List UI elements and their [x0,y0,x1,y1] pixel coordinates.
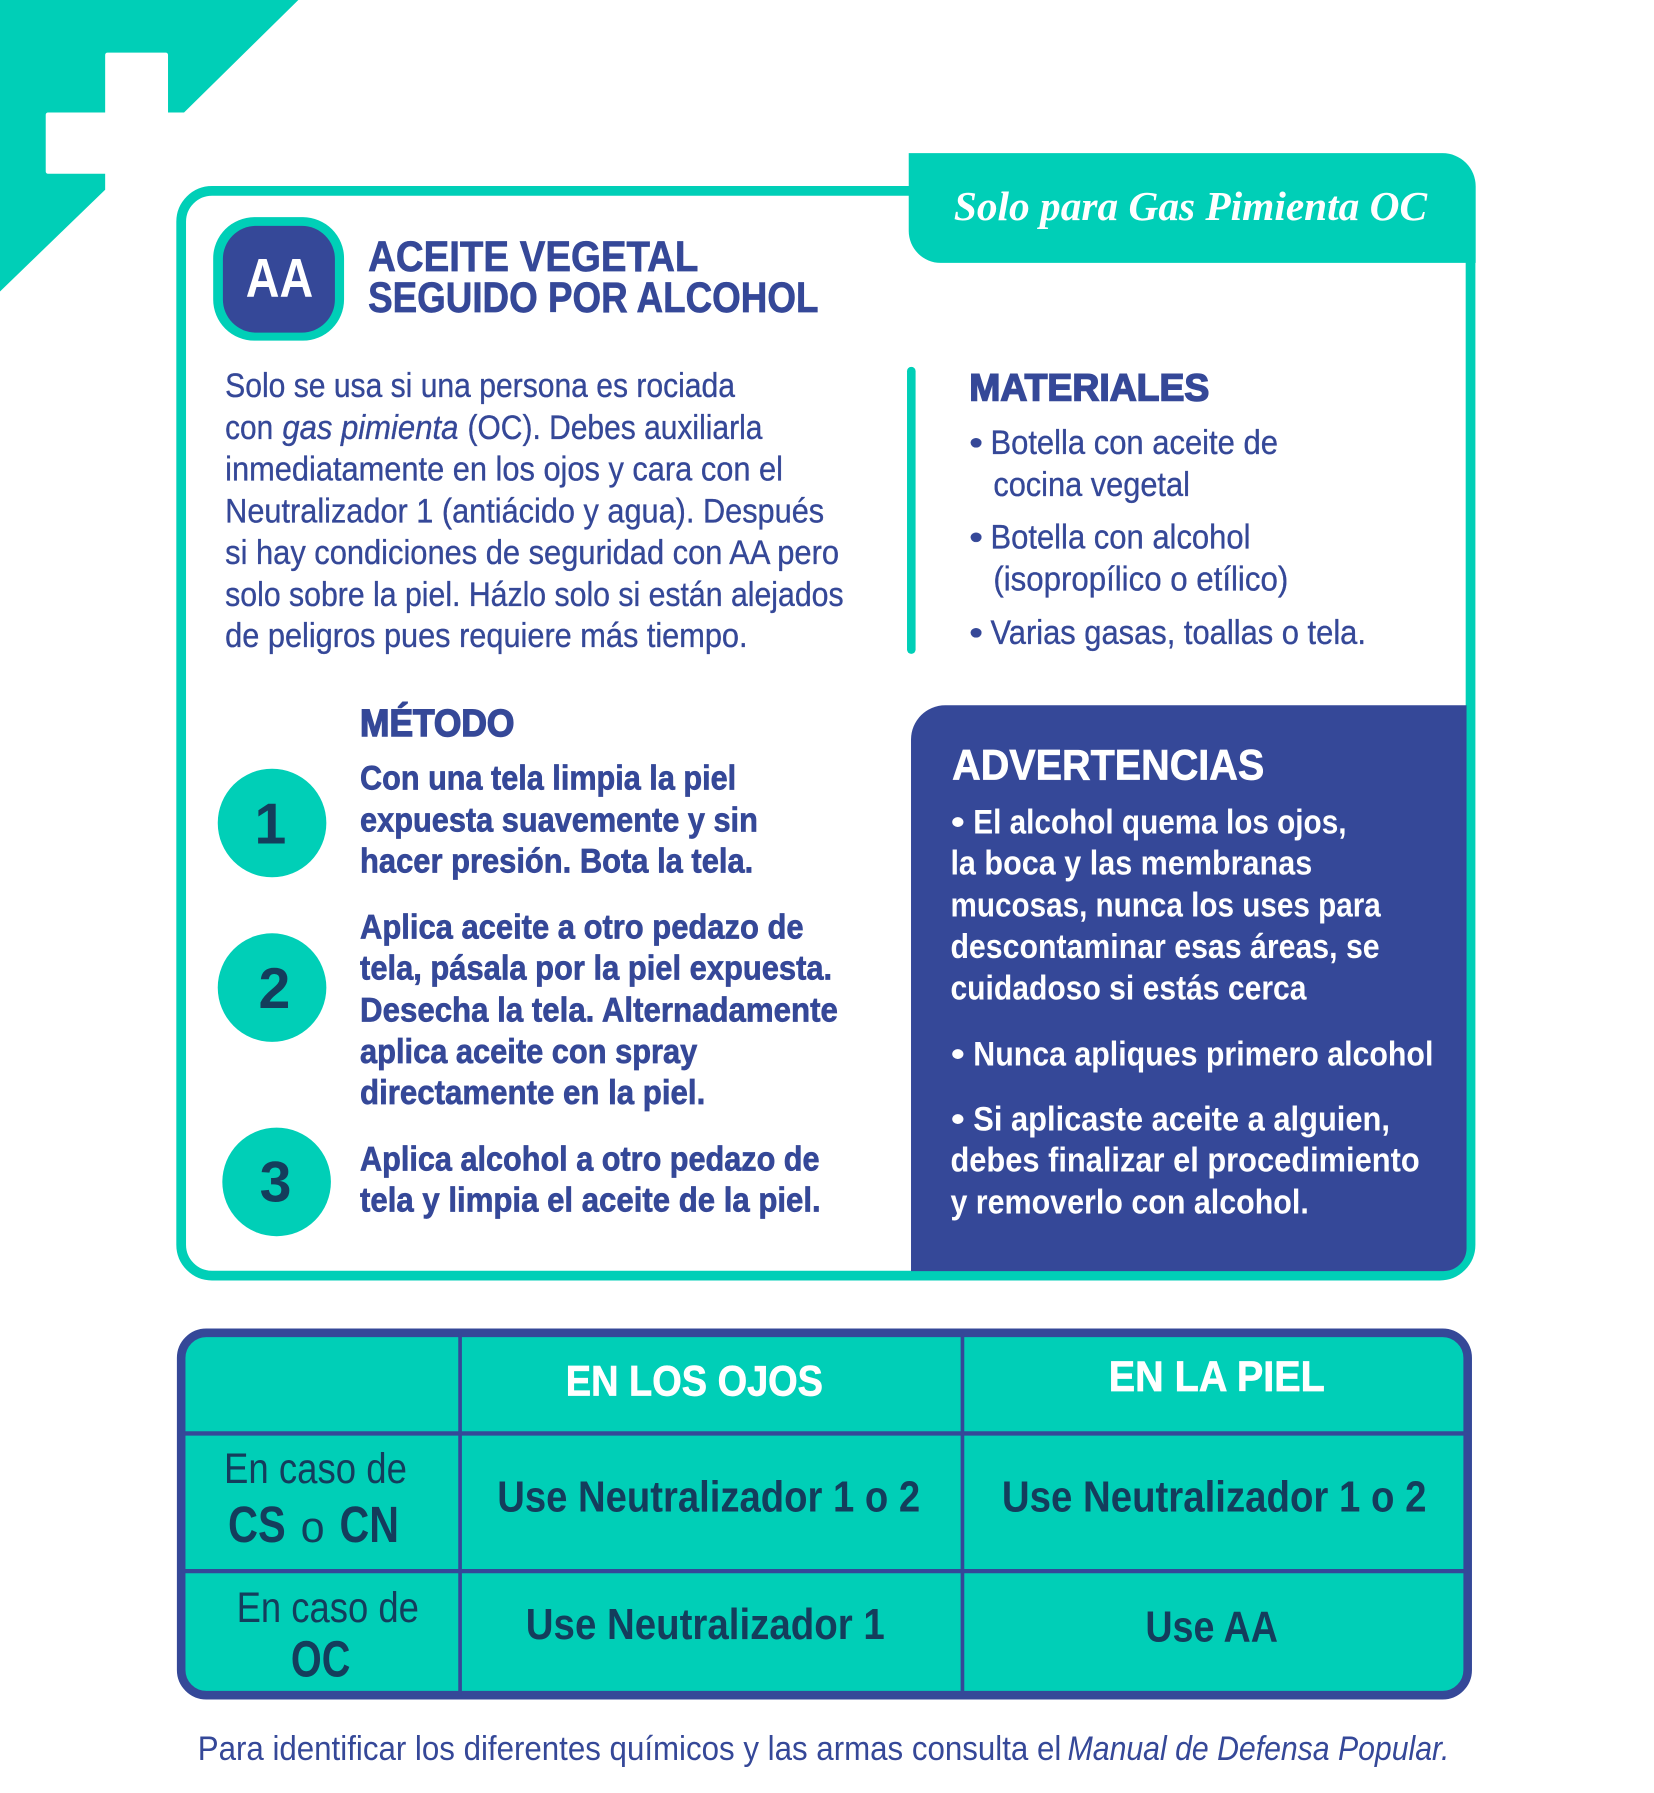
heading: ACEITE VEGETAL [368,233,698,280]
materiales list: • [969,424,983,462]
advertencias list: debes finalizar el procedimiento [950,1142,1420,1180]
advertencias list: descontaminar esas áreas, se [950,928,1380,966]
cell: ojos OC: Use Neutralizador 1 [526,1601,885,1649]
step 1 text [360,759,758,881]
tab: solo para gas pimienta [909,153,1476,263]
intro text block: gas pimienta [282,409,458,447]
row label: OC: OC [291,1630,350,1688]
row label: CS o CN [224,1445,407,1553]
advertencias heading: ADVERTENCIAS [952,742,1264,789]
row label: CS o CN: En caso de [224,1445,407,1492]
advertencias list: • [951,803,965,841]
materiales section [969,367,1366,652]
advertencias list: El alcohol quema los ojos, [973,803,1347,841]
intro text block: si hay condiciones de seguridad con AA pero [225,534,839,572]
advertencias list: cuidadoso si estás cerca [950,970,1307,1008]
corner banner with medical cross [0,0,298,291]
materiales list: (isopropílico o etílico) [993,561,1288,599]
summary table [181,1333,1468,1695]
step 2 text: Desecha la tela. Alternadamente [360,991,838,1029]
materiales list: cocina vegetal [993,466,1190,504]
intro text block: solo sobre la piel. Házlo solo si están alejados [225,576,844,614]
footer note: Para identificar los diferentes químicos y las armas consulta el [198,1730,1061,1768]
step 2 text [360,908,838,1112]
row label: CS o CN: CN [339,1495,399,1553]
advertencias list: mucosas, nunca los uses para [950,887,1382,925]
icon: number 3 [222,1128,331,1236]
advertencias list: y removerlo con alcohol. [950,1183,1309,1221]
step 1 text: hacer presión. Bota la tela. [360,843,753,881]
step 1 text: Con una tela limpia la piel [360,759,736,797]
column header: en los ojos: EN LOS OJOS [566,1358,823,1405]
advertencias list: Si aplicaste aceite a alguien, [973,1100,1390,1138]
materiales list: Varias gasas, toallas o tela. [990,614,1366,652]
step 2 text: Aplica aceite a otro pedazo de [360,908,804,946]
materiales list [969,424,1366,652]
intro text block: (OC). Debes auxiliarla [468,409,763,447]
row label: CS o CN: CS [228,1495,286,1553]
intro text block: Solo se usa si una persona es rociada [225,367,736,405]
materiales list: • [969,614,983,652]
column header: en la piel: EN LA PIEL [1109,1353,1325,1400]
icon: AA badge [213,217,344,341]
heading [368,233,818,321]
row label: OC [237,1584,419,1688]
intro text block: con [225,409,273,447]
panel outline [181,191,1471,1276]
advertencias list: la boca y las membranas [950,844,1312,882]
step 3 [222,1128,821,1236]
main panel [181,153,1476,1276]
step 3 text [360,1140,821,1220]
advertencias list: • [951,1100,965,1138]
intro text block: Neutralizador 1 (antiácido y agua). Después [225,492,824,530]
divider bar [907,367,916,654]
materiales list: Botella con aceite de [990,424,1278,462]
row label: OC: En caso de [237,1584,419,1631]
step 2 text: aplica aceite con spray [360,1033,697,1071]
cell: ojos CS/CN: Use Neutralizador 1 o 2 [497,1474,920,1522]
tab: solo para gas pimienta: Solo para Gas Pimienta OC [954,183,1428,229]
icon: AA badge: AA [246,247,313,309]
advertencias list: • [951,1035,965,1073]
row label: CS o CN: o [301,1504,325,1552]
materiales heading: MATERIALES [969,367,1209,409]
step 2 [218,908,838,1112]
table frame [181,1333,1468,1695]
icon: number 2 [218,933,326,1042]
step 1 text: expuesta suavemente y sin [360,802,758,840]
metodo heading: MÉTODO [360,702,514,744]
advertencias list: Nunca apliques primero alcohol [973,1035,1433,1073]
cell: piel CS/CN: Use Neutralizador 1 o 2 [1002,1474,1427,1522]
materiales list: • [969,519,983,557]
intro text block: de peligros pues requiere más tiempo. [225,617,748,655]
step 2 text: tela, pásala por la piel expuesta. [360,950,832,988]
cell: piel OC: Use AA [1145,1603,1278,1651]
step 3 text: tela y limpia el aceite de la piel. [360,1182,821,1220]
intro text block [225,367,844,655]
intro text block: inmediatamente en los ojos y cara con el [225,451,783,489]
step 2 text: directamente en la piel. [360,1074,705,1112]
step 1 [218,759,758,881]
materiales list: Botella con alcohol [990,519,1251,557]
heading: SEGUIDO POR ALCOHOL [368,274,818,321]
icon: number 1 [218,769,326,877]
icon: number 3: 3 [260,1150,291,1214]
panel: advertencias [911,705,1467,1271]
step 3 text: Aplica alcohol a otro pedazo de [360,1140,820,1178]
advertencias list [950,803,1433,1221]
icon: number 1: 1 [254,793,286,857]
footer note: Manual de Defensa Popular. [1068,1730,1449,1768]
icon: number 2: 2 [258,957,290,1021]
